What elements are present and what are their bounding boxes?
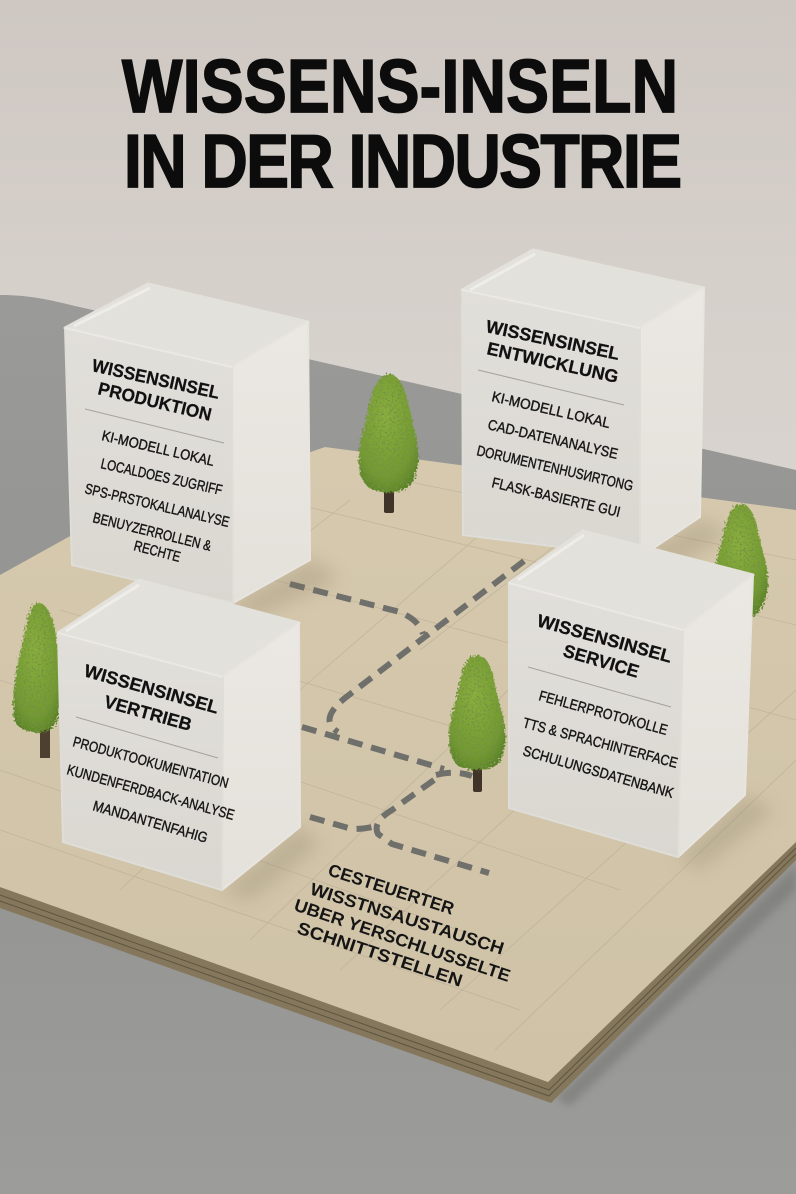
box: Wissensinsel Produktion <box>65 284 310 603</box>
heading: Service: SERVICE <box>561 641 641 682</box>
dashed connection paths <box>290 561 524 873</box>
caption on board: SCHNITTSTELLEN <box>295 918 465 991</box>
list: Entwicklung: DORUMENTENHUSИRTONG <box>475 443 635 495</box>
list: Entwicklung: KI-MODELL LOKAL <box>490 389 612 432</box>
list: Produktion <box>83 428 231 566</box>
tree: far left <box>13 603 62 758</box>
list: Produktion: BENUYZERROLLEN & <box>91 510 213 555</box>
caption on board: UBER YERSCHLUSSELTE <box>292 895 513 986</box>
caption on board <box>292 860 513 991</box>
heading: Vertrieb: VERTRIEB <box>102 692 194 735</box>
heading: Service: WISSENSINSEL <box>535 611 674 667</box>
list: Produktion: KI-MODELL LOKAL <box>100 428 216 470</box>
background wall <box>0 0 796 560</box>
tree: back right <box>714 504 768 635</box>
heading: Produktion: WISSENSINSEL <box>90 355 221 403</box>
list: Produktion: SPS-PRSTOKALLANALYSE <box>83 481 231 531</box>
list: Produktion: RECHTE <box>132 538 182 566</box>
list: Service: TTS & SPRACHINTERFACE <box>521 715 679 772</box>
list: Vertrieb <box>65 734 236 847</box>
box: Wissensinsel Service <box>509 531 753 857</box>
board shadow <box>556 866 796 1106</box>
title <box>122 44 682 203</box>
board grid lines <box>0 480 796 1050</box>
tree: back centre <box>359 374 418 513</box>
heading: Entwicklung: WISSENSINSEL <box>484 316 621 364</box>
list: Service: SCHULUNGSDATENBANK <box>521 743 676 802</box>
grey floor <box>0 295 796 1194</box>
list: Vertrieb: PRODUKTOOKUMENTATION <box>71 734 230 792</box>
list: Vertrieb: MANDANTENFAHIG <box>91 798 209 847</box>
heading: Entwicklung <box>484 316 621 387</box>
title: WISSENS-INSELN <box>122 44 678 128</box>
box: Wissensinsel Entwicklung <box>462 250 704 557</box>
title: IN DER INDUSTRIE <box>124 119 682 203</box>
list: Entwicklung <box>475 389 635 521</box>
box: Wissensinsel Vertrieb <box>58 580 300 890</box>
model board <box>0 447 796 1103</box>
caption on board: WISSTNSAUSTAUSCH <box>308 879 506 959</box>
box shadows <box>222 518 775 900</box>
list: Entwicklung: CAD-DATENANALYSE <box>486 417 620 463</box>
heading: Produktion <box>90 355 221 425</box>
list: Vertrieb: KUNDENFERDBACK-ANALYSE <box>65 762 236 824</box>
list: Produktion: LOCALDOES ZUGRIFF <box>99 456 224 499</box>
tree: centre front <box>449 655 505 792</box>
list: Service: FEHLERPROTOKOLLE <box>537 688 669 739</box>
heading: Produktion: PRODUKTION <box>96 378 214 425</box>
list: Entwicklung: FLASK-BASIERTE GUI <box>490 475 622 521</box>
caption on board: CESTEUERTER <box>326 860 457 919</box>
heading: Vertrieb: WISSENSINSEL <box>82 661 221 718</box>
list: Service <box>521 688 679 802</box>
heading: Entwicklung: ENTWICKLUNG <box>485 338 620 387</box>
